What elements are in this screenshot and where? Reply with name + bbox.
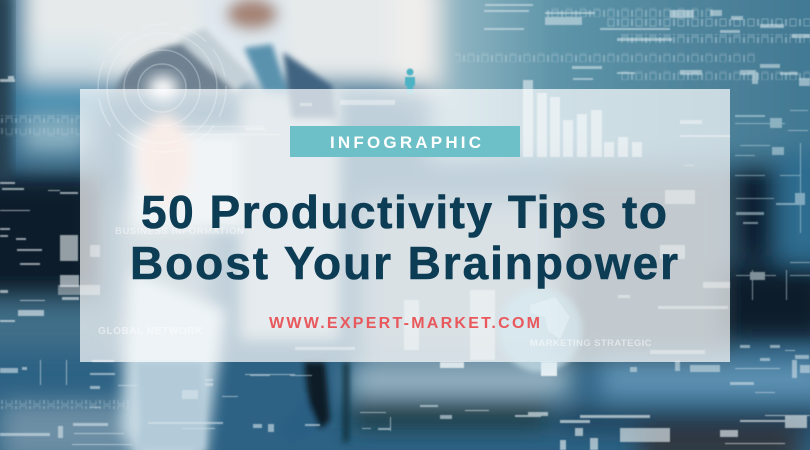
faint bar chart — [523, 80, 642, 157]
left edge shadow — [0, 0, 10, 180]
hand glow — [148, 76, 178, 100]
faint caption: global: GLOBAL NETWORK — [98, 326, 203, 337]
shirt and skin — [120, 0, 340, 450]
icon: person — [405, 68, 415, 94]
website url: WWW.EXPERT-MARKET.COM — [269, 315, 540, 332]
faint dashboard details — [58, 100, 730, 360]
badge — [290, 126, 520, 157]
title — [130, 186, 678, 289]
faint caption: marketing: MARKETING STRATEGIC — [530, 338, 652, 349]
suit jacket — [116, 28, 349, 450]
title line 1: 50 Productivity Tips to — [141, 186, 667, 238]
faint caption: business: BUSINESS INFORMATION — [115, 226, 245, 237]
faint globe — [498, 288, 582, 372]
man in suit — [98, 0, 349, 450]
title line 2: Boost Your Brainpower — [130, 237, 678, 289]
badge label: INFOGRAPHIC — [330, 133, 481, 152]
holographic rings — [98, 24, 226, 152]
translucent panel — [58, 80, 730, 372]
